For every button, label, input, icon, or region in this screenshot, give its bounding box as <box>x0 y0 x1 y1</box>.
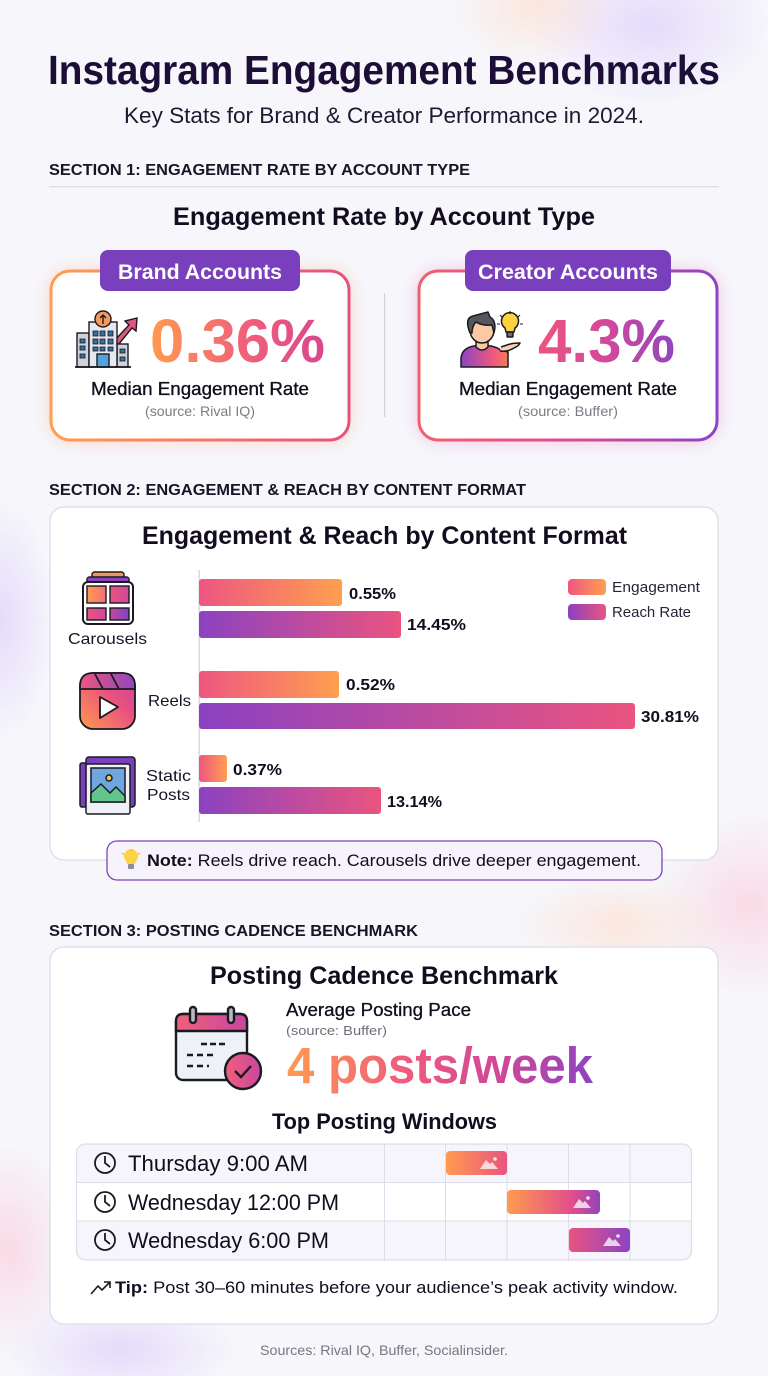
legend: Engagement <box>612 579 701 596</box>
icon: trend arrow <box>91 1282 110 1294</box>
row: thursday <box>95 1151 507 1176</box>
tip: Tip: Post 30–60 minutes before your audience’s peak activity window. <box>115 1278 678 1297</box>
legend <box>568 579 701 621</box>
icon: static posts <box>80 757 135 814</box>
callout: note <box>107 841 662 880</box>
panel: creator accounts <box>418 250 718 441</box>
bar chart: engagement and reach: 0.52% <box>346 677 395 694</box>
label: static posts <box>146 768 191 804</box>
row: wednesday evening: Wednesday 6:00 PM <box>128 1228 329 1253</box>
brand pill <box>100 250 300 291</box>
bar chart: engagement and reach: 13.14% <box>387 794 442 811</box>
row: wednesday evening <box>95 1228 630 1253</box>
brand pill: Brand Accounts <box>118 261 282 284</box>
icon: calendar with check <box>176 1007 261 1089</box>
bar chart: engagement and reach <box>198 570 699 822</box>
footer sources: Sources: Rival IQ, Buffer, Socialinsider. <box>260 1342 508 1358</box>
posting windows table <box>76 1144 692 1260</box>
legend: Reach Rate <box>612 604 691 621</box>
section 2 label: SECTION 2: ENGAGEMENT & REACH BY CONTENT FORMAT <box>49 482 526 499</box>
subtitle: Key Stats for Brand & Creator Performance in 2024. <box>124 103 644 128</box>
label: carousels: Carousels <box>68 631 147 648</box>
posting pace stat: 4 posts/week <box>287 1037 594 1094</box>
section 1 heading: Engagement Rate by Account Type <box>173 203 595 231</box>
posting pace source: (source: Buffer) <box>286 1023 387 1038</box>
posting windows heading: Top Posting Windows <box>272 1109 497 1134</box>
creator pill: Creator Accounts <box>478 261 658 284</box>
icon: carousels <box>83 572 133 624</box>
panel: posting cadence <box>50 947 718 1324</box>
label: static posts: Posts <box>147 787 190 804</box>
panel: content format <box>50 507 718 860</box>
posting pace label: Average Posting Pace <box>286 1000 471 1020</box>
section 3 label: SECTION 3: POSTING CADENCE BENCHMARK <box>49 923 418 940</box>
label: static posts: Static <box>146 768 191 785</box>
divider <box>384 293 385 417</box>
label: reels: Reels <box>148 693 191 710</box>
icon: light bulb <box>122 849 140 869</box>
row: wednesday noon: Wednesday 12:00 PM <box>128 1190 339 1215</box>
panel: brand accounts <box>50 250 350 441</box>
bar chart: engagement and reach: 14.45% <box>407 617 466 634</box>
creator source: (source: Buffer) <box>518 403 618 419</box>
creator stat: 4.3% <box>538 307 675 375</box>
creator pill <box>465 250 671 291</box>
bar chart: engagement and reach: 0.37% <box>233 762 282 779</box>
callout: note: Note: Reels drive reach. Carousels drive deeper engagement. <box>147 851 641 870</box>
bar chart: engagement and reach: 30.81% <box>641 709 699 726</box>
bar chart: engagement and reach: 0.55% <box>349 586 396 603</box>
brand source: (source: Rival IQ) <box>145 403 255 419</box>
icon: office building with rising arrow <box>75 311 137 367</box>
title: Instagram Engagement Benchmarks <box>48 47 720 93</box>
brand stat: 0.36% <box>150 307 325 375</box>
section 1 label: SECTION 1: ENGAGEMENT RATE BY ACCOUNT TYPE <box>49 162 470 179</box>
format heading: Engagement & Reach by Content Format <box>142 522 628 550</box>
icon: reels <box>80 673 135 729</box>
cadence heading: Posting Cadence Benchmark <box>210 962 558 990</box>
creator caption: Median Engagement Rate <box>459 379 677 399</box>
icon: creator with light bulb <box>461 311 523 367</box>
brand caption: Median Engagement Rate <box>91 379 309 399</box>
row: thursday: Thursday 9:00 AM <box>128 1151 308 1176</box>
row: wednesday noon <box>95 1190 600 1215</box>
